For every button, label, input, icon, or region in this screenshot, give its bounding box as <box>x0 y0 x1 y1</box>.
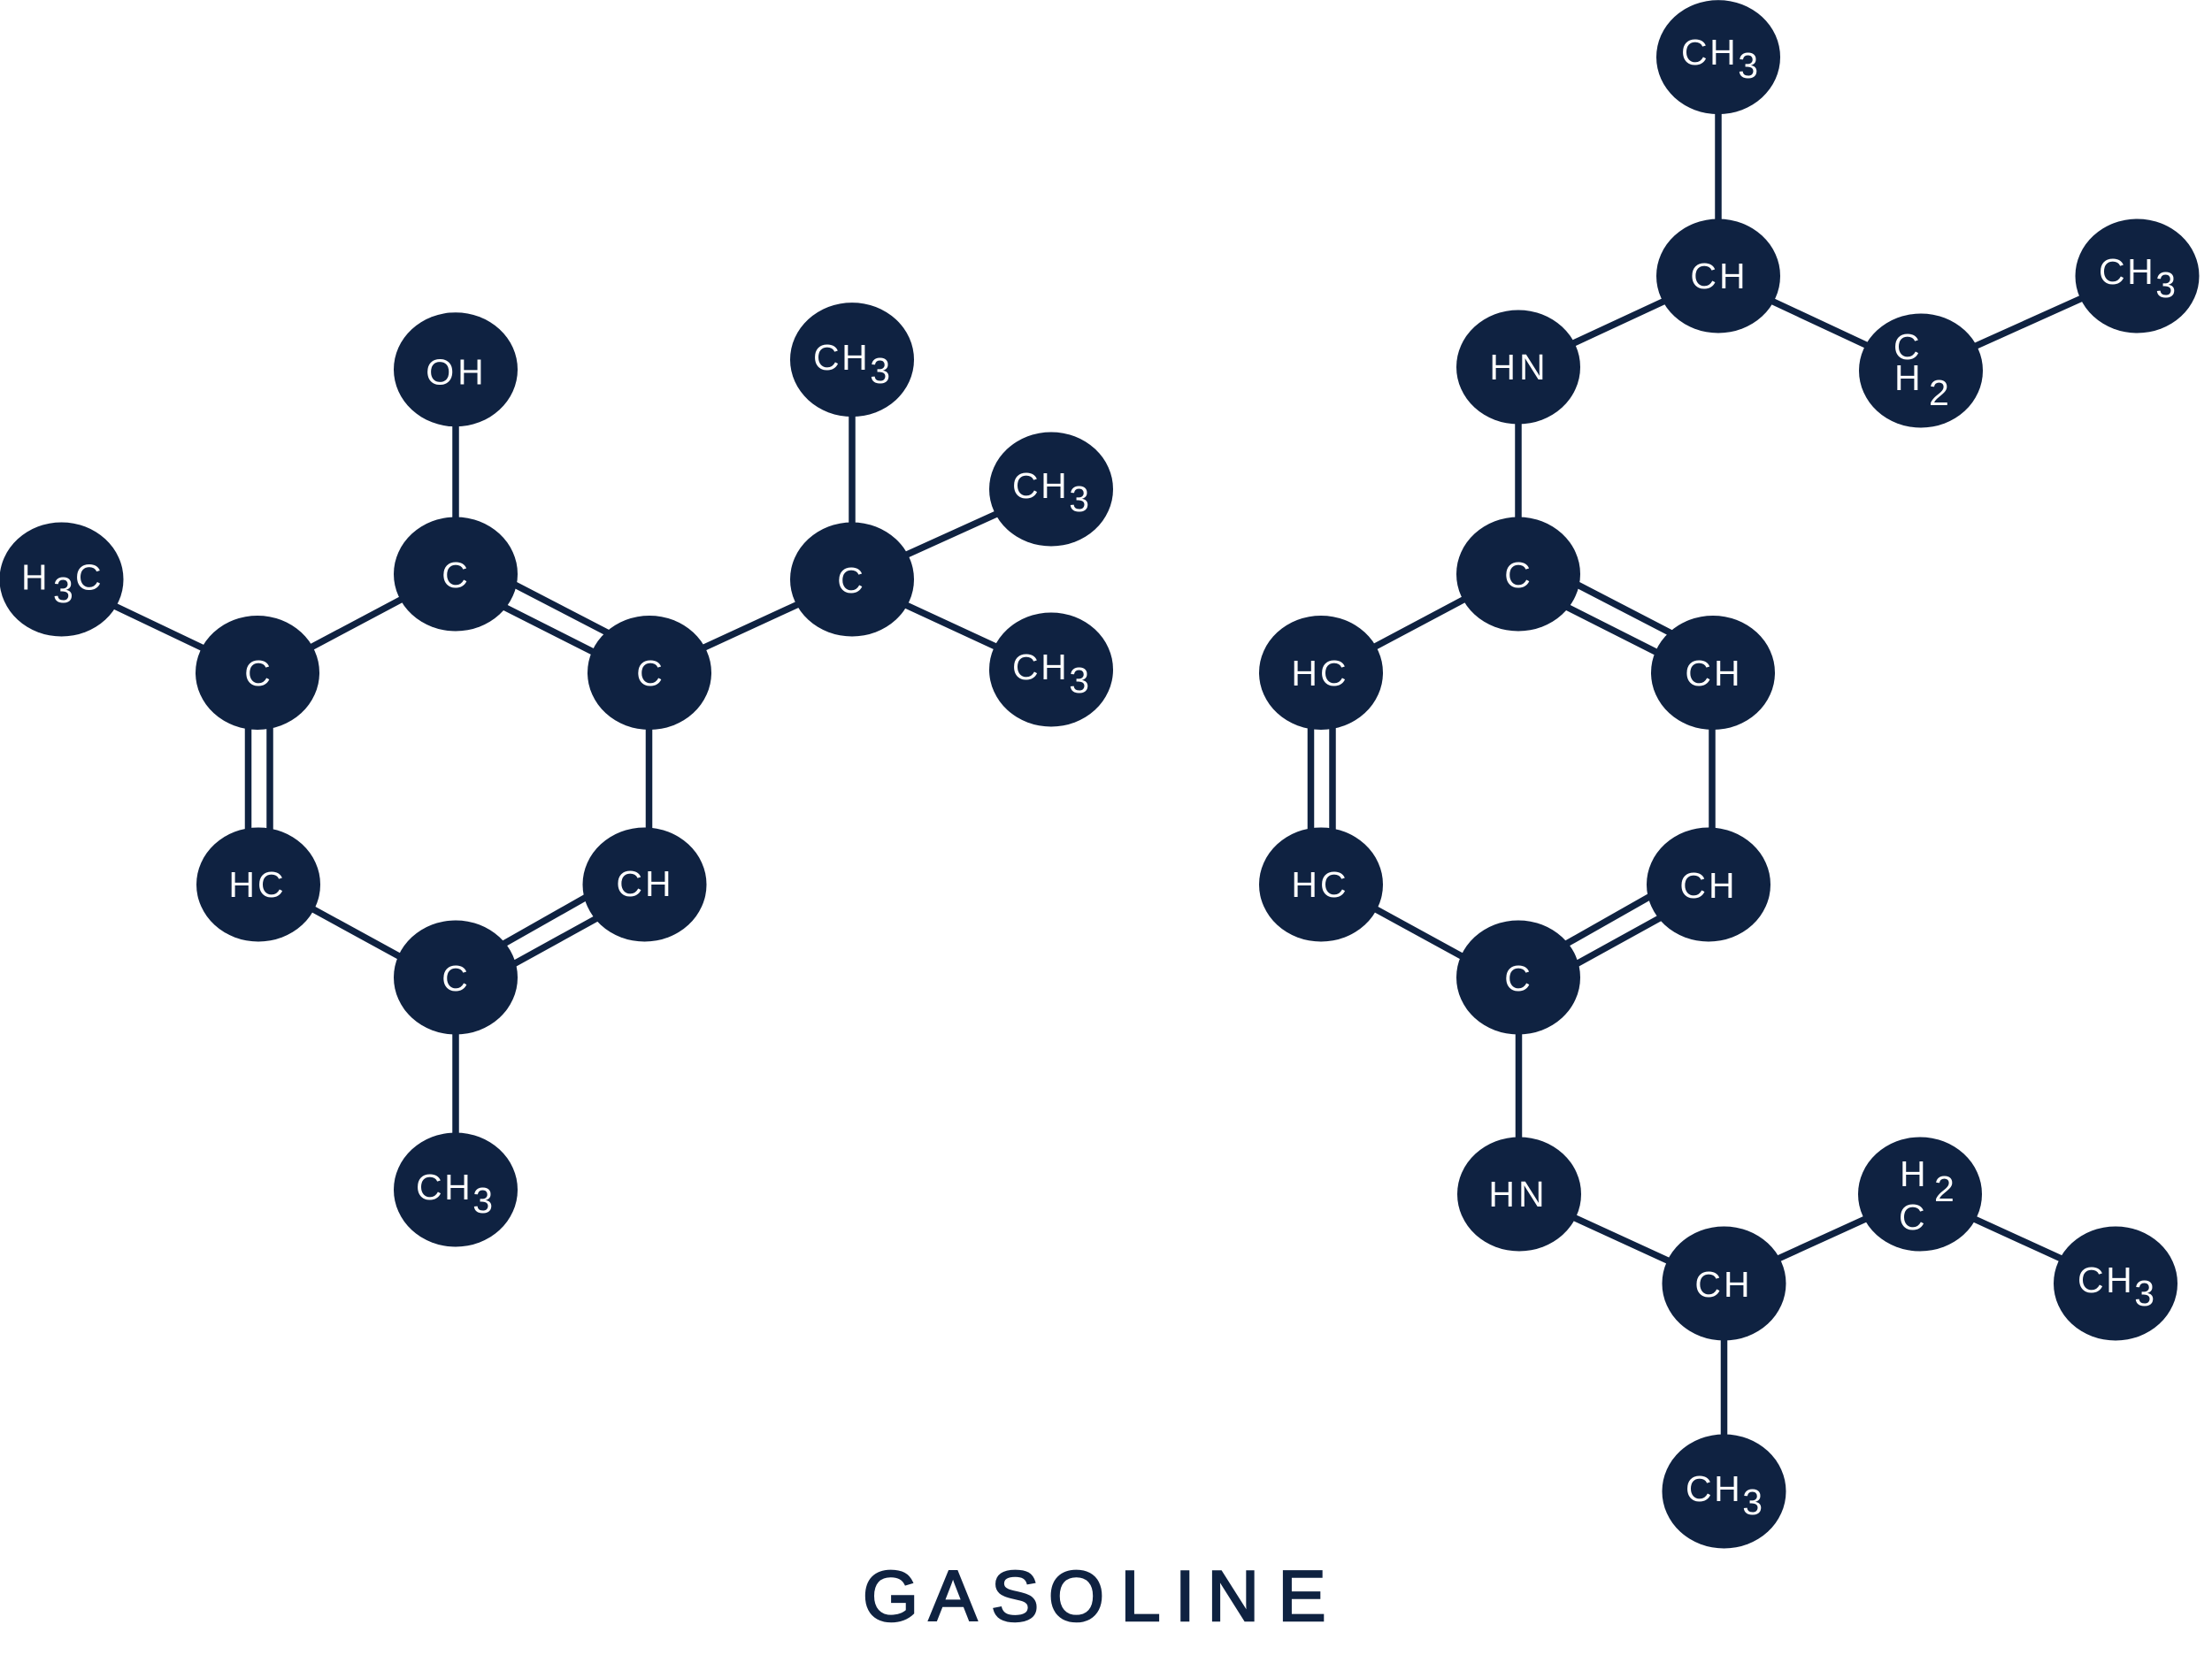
atom: CH lower <box>1662 1226 1786 1341</box>
atom: CH3 bottom <box>1662 1435 1786 1548</box>
atom: CH3 lower right: 3 <box>1069 660 1092 701</box>
atom: CH3 top <box>1656 0 1780 114</box>
atom: HN lower <box>1457 1138 1581 1251</box>
atom: H2C <box>1858 1138 1982 1251</box>
atom: CH2: 2 <box>1929 372 1949 413</box>
atom: HC ring: HC <box>228 864 287 905</box>
atom: HN lower: HN <box>1488 1174 1548 1214</box>
molecule: right structure <box>1259 0 2200 1549</box>
atom: C bottom: C <box>1504 958 1531 999</box>
atom: CH upper ring <box>1651 616 1775 730</box>
atom: CH2 <box>1859 313 1983 428</box>
atom: CH lower ring <box>1647 828 1770 941</box>
atom: OH <box>394 312 518 426</box>
atom: HC upper <box>1259 616 1383 730</box>
atom: H3C: H <box>21 557 48 598</box>
bonds: left structure <box>62 360 1051 1190</box>
atom: OH: OH <box>426 352 488 393</box>
atom: HC ring <box>196 828 320 941</box>
atom: CH ring: CH <box>616 863 674 904</box>
atom: CH3 top <box>790 303 914 417</box>
atom: C right <box>588 616 711 730</box>
atom: C side <box>790 522 914 637</box>
atom: CH3 bottom <box>394 1132 518 1247</box>
atom: C side: C <box>837 560 864 601</box>
bonds: right structure <box>1311 57 2138 1491</box>
atom: C top <box>394 517 518 632</box>
atom: CH3 upper right: 3 <box>1069 479 1092 519</box>
atom: CH2: H <box>1894 357 1921 398</box>
atom: CH3 upper right: 3 <box>2155 264 2178 305</box>
atom: H3C <box>0 522 124 637</box>
atom: CH3 lower right: CH <box>1012 647 1069 687</box>
atom: CH lower: CH <box>1694 1264 1753 1305</box>
atom: CH3 top: CH <box>1681 32 1738 73</box>
atom: HN upper: HN <box>1489 347 1549 387</box>
atom: H2C: C <box>1899 1197 1925 1237</box>
atom: CH3 upper right: CH <box>1012 465 1069 506</box>
atom: C right: C <box>636 653 663 693</box>
atom: C bottom: C <box>442 958 468 999</box>
atom: CH3 top: CH <box>813 337 870 378</box>
atom: CH3 upper right <box>2076 219 2200 333</box>
atom: C top: C <box>442 555 468 595</box>
atom: CH3 lower right <box>989 612 1113 727</box>
atom: H2C: 2 <box>1934 1168 1955 1209</box>
atom: CH3 upper right: CH <box>2099 251 2155 292</box>
atom: CH3 top: 3 <box>1738 45 1761 86</box>
atom: CH3 lower right: 3 <box>2134 1273 2157 1314</box>
atom: CH upper: CH <box>1690 256 1748 296</box>
atom: H2C: H <box>1900 1153 1926 1194</box>
atom: CH upper <box>1656 219 1780 333</box>
atom: CH2: C <box>1893 326 1920 367</box>
atom: CH3 bottom: 3 <box>472 1180 495 1221</box>
atom: HC lower <box>1259 828 1383 941</box>
title: GASOLINE <box>863 1557 1326 1636</box>
atom: CH3 upper right <box>989 432 1113 547</box>
atom: HC lower: HC <box>1291 864 1349 905</box>
atom: H3C: 3 <box>53 570 73 610</box>
atom: CH upper ring: CH <box>1685 653 1743 693</box>
atom: C left <box>196 616 319 730</box>
atom: HC upper: HC <box>1291 653 1349 693</box>
atom: CH3 lower right <box>2054 1226 2177 1341</box>
atom: CH3 bottom: CH <box>1686 1468 1742 1509</box>
atom: C left: C <box>244 653 271 693</box>
atom: C top <box>1456 517 1580 632</box>
molecule: left structure <box>0 303 1113 1247</box>
atom: CH lower ring: CH <box>1679 865 1738 906</box>
atom: CH3 bottom: CH <box>416 1167 472 1207</box>
atom: C bottom <box>394 920 518 1035</box>
atom: C bottom <box>1456 920 1580 1035</box>
atom: HN upper <box>1456 310 1580 425</box>
atom: CH3 lower right: CH <box>2078 1260 2134 1300</box>
atom: CH3 top: 3 <box>870 350 893 391</box>
atom: CH3 bottom: 3 <box>1742 1482 1765 1522</box>
atom: H3C: C <box>75 557 102 598</box>
atom: CH ring <box>582 828 706 941</box>
atom: C top: C <box>1504 555 1531 595</box>
